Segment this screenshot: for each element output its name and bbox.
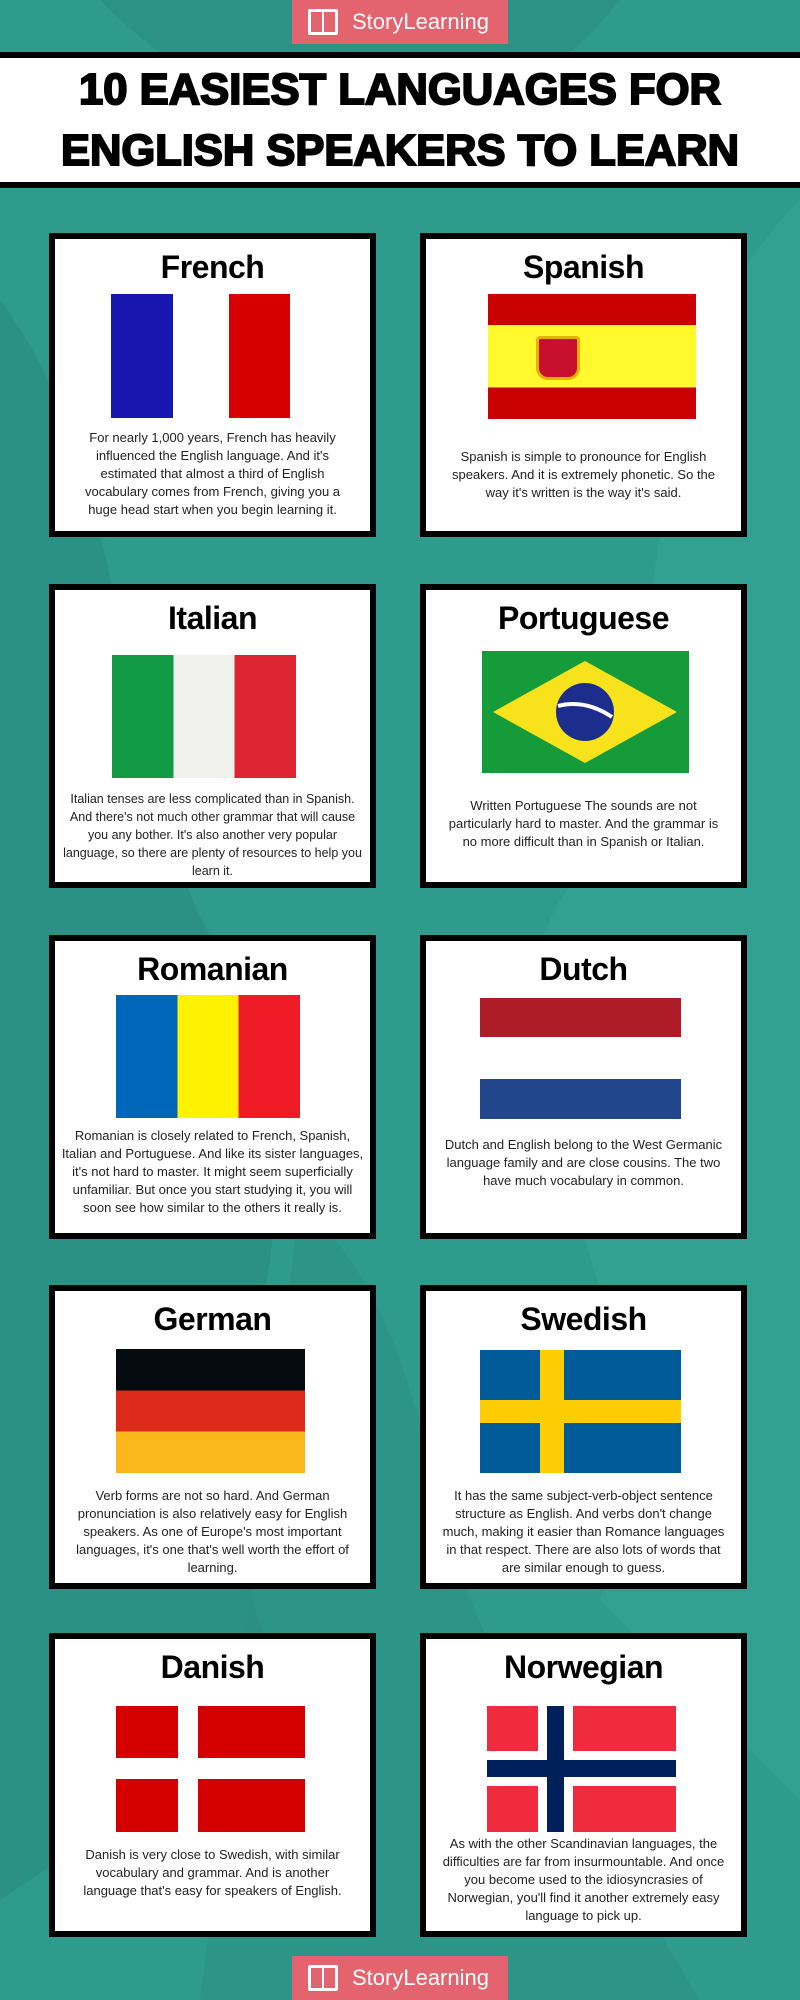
- flag: France: [111, 294, 290, 418]
- icon: coat of arms: [536, 336, 580, 380]
- panel: French: French: [161, 249, 264, 285]
- panel: Portuguese: [420, 584, 747, 888]
- title: 10 EASIEST LANGUAGES FOR: [79, 65, 721, 114]
- flag: Sweden: [480, 1350, 681, 1473]
- panel: Italian: [49, 584, 376, 888]
- flag: Italy: [112, 655, 296, 778]
- logo top: StoryLearning: [352, 9, 489, 34]
- panel: Danish: Danish: [161, 1649, 264, 1685]
- panel: Swedish: [420, 1285, 747, 1589]
- panel: Spanish: Spanish: [523, 249, 644, 285]
- panel: Dutch: Dutch and English belong to the West Germanic language family and are close cousins. The two have much vocabulary in common.: [445, 1137, 722, 1188]
- logo top: [292, 0, 508, 44]
- flag: Germany: [116, 1349, 305, 1473]
- title: ENGLISH SPEAKERS TO LEARN: [61, 126, 739, 175]
- panel: German: Verb forms are not so hard. And German pronunciation is also relatively easy for English speakers. As one of Europe's most important languages, it's one that's well worth the effort of learning.: [76, 1488, 349, 1575]
- title: [61, 65, 739, 175]
- panel: Italian: Italian: [168, 600, 257, 636]
- panel: Portuguese: Portuguese: [498, 600, 669, 636]
- panel: French: [49, 233, 376, 537]
- panel: Danish: Danish is very close to Swedish, with similar vocabulary and grammar. And is another language that's easy for speakers of English.: [83, 1847, 342, 1898]
- logo bottom: StoryLearning: [352, 1965, 489, 1990]
- flag: Netherlands: [480, 998, 681, 1119]
- panel: Norwegian: As with the other Scandinavian languages, the difficulties are far from insurmountable. And once you become used to the idiosyncrasies of Norwegian, you'll find it another extremely easy language to pick up.: [443, 1836, 724, 1923]
- panel: Danish: [49, 1633, 376, 1937]
- panel: Dutch: Dutch: [539, 951, 628, 987]
- panel: Norwegian: Norwegian: [504, 1649, 663, 1685]
- flag: Norway: [487, 1706, 676, 1832]
- flag: Spain: [488, 294, 696, 419]
- panel: Italian: Italian tenses are less complicated than in Spanish. And there's not much other grammar that will cause you any bother. It's also another very popular language, so there are plenty of resources to help you learn it.: [63, 792, 362, 878]
- panel: Romanian: Romanian: [137, 951, 288, 987]
- panel: Romanian: [49, 935, 376, 1239]
- panel: Swedish: It has the same subject-verb-object sentence structure as English. And verbs don't change much, making it easier than Romance languages in that respect. There are also lots of words that are similar enough to guess.: [443, 1488, 724, 1575]
- panel: Swedish: Swedish: [520, 1301, 647, 1337]
- panel: Spanish: [420, 233, 747, 537]
- flag: Romania: [116, 995, 300, 1118]
- panel: Romanian: Romanian is closely related to French, Spanish, Italian and Portuguese. And like its sister languages, it's not hard to master. It might seem superficially unfamiliar. But once you start studying it, you will soon see how similar to the others it really is.: [62, 1128, 363, 1215]
- flag: Denmark: [116, 1706, 305, 1832]
- panel: French: For nearly 1,000 years, French has heavily influenced the English language. And it's estimated that almost a third of English vocabulary comes from French, giving you a huge head start when you begin learning it.: [85, 430, 340, 517]
- logo bottom: [292, 1956, 508, 2000]
- panel: Spanish: Spanish is simple to pronounce for English speakers. And it is extremely phonetic. So the way it's written is the way it's said.: [452, 449, 715, 500]
- panel: German: [49, 1285, 376, 1589]
- panel: German: German: [154, 1301, 271, 1337]
- panel: Norwegian: [420, 1633, 747, 1937]
- panel: Dutch: [420, 935, 747, 1239]
- title band: [0, 52, 800, 188]
- panel: Portuguese: Written Portuguese The sounds are not particularly hard to master. And the grammar is no more difficult than in Spanish or Italian.: [449, 798, 718, 849]
- flag: Brazil: [482, 651, 689, 773]
